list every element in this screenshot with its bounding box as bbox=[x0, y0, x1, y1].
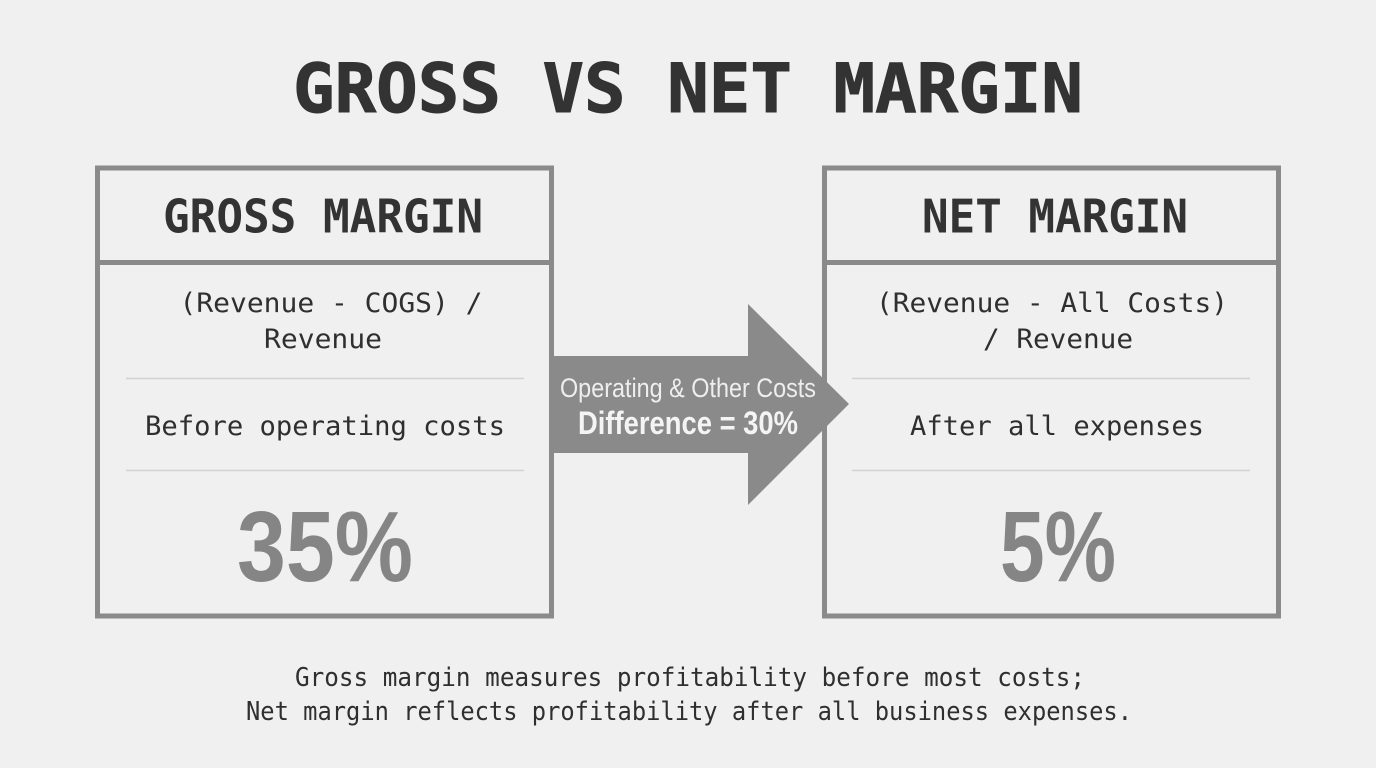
panel: gross margin bbox=[97, 168, 552, 616]
heading: gross margin: GROSS MARGIN bbox=[163, 190, 483, 244]
value: 35%: 35% bbox=[237, 491, 413, 603]
panel: net margin bbox=[824, 168, 1279, 616]
title: GROSS VS NET MARGIN bbox=[293, 50, 1083, 129]
arrow value: Difference = 30% bbox=[578, 405, 798, 441]
footer note: Net margin reflects profitability after all business expenses. bbox=[246, 697, 1132, 727]
formula: net margin bbox=[876, 288, 1228, 355]
arrow: difference bbox=[553, 304, 849, 505]
arrow label: Operating & Other Costs bbox=[560, 373, 816, 403]
formula: gross margin bbox=[180, 288, 482, 355]
value: 5%: 5% bbox=[1000, 491, 1116, 603]
footer note bbox=[246, 663, 1132, 727]
heading: net margin: NET MARGIN bbox=[922, 190, 1188, 244]
formula: net margin: / Revenue bbox=[983, 324, 1133, 355]
formula: gross margin: (Revenue - COGS) / bbox=[180, 288, 482, 319]
description: gross margin: Before operating costs bbox=[145, 411, 505, 442]
formula: gross margin: Revenue bbox=[264, 324, 382, 355]
formula: net margin: (Revenue - All Costs) bbox=[876, 288, 1228, 319]
description: net margin: After all expenses bbox=[910, 411, 1204, 442]
footer note: Gross margin measures profitability before most costs; bbox=[295, 663, 1085, 693]
